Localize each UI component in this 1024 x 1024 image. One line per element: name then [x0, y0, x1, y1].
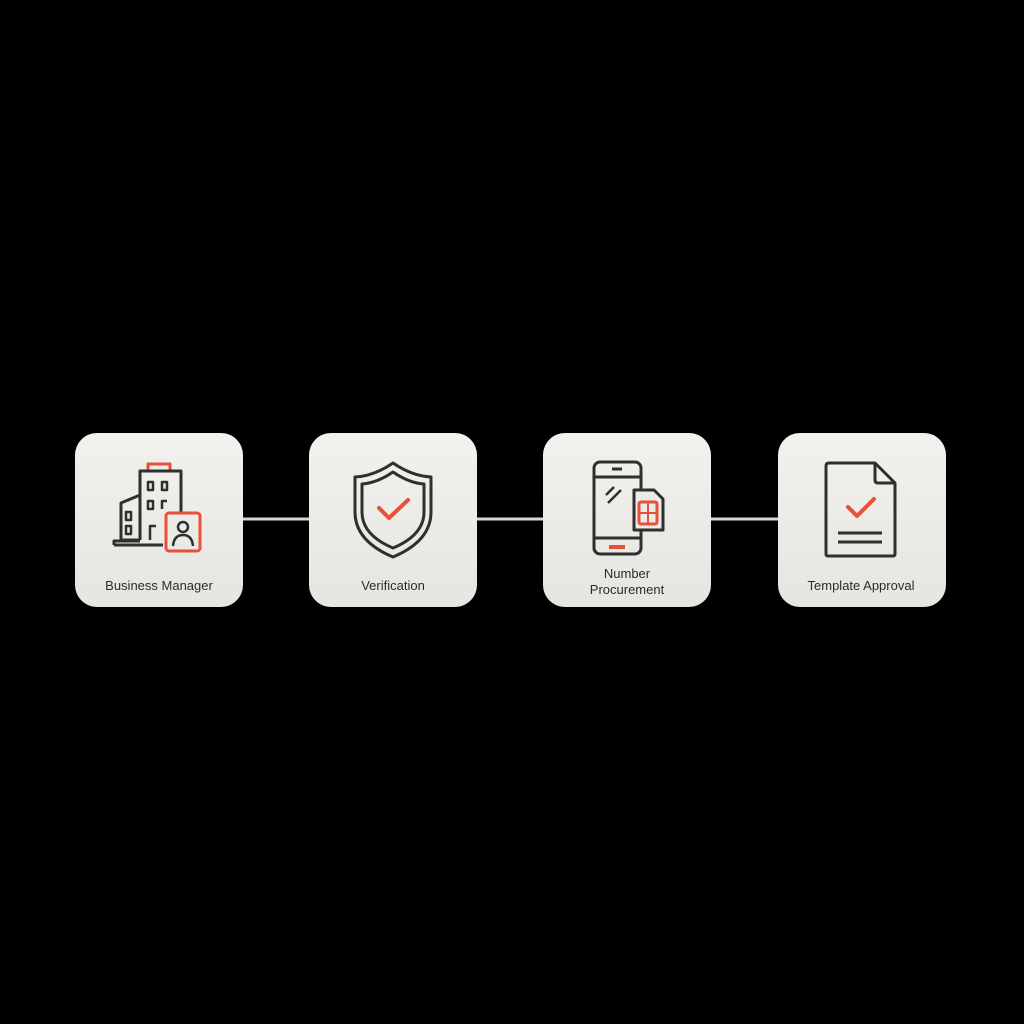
icon: shield with check	[355, 463, 431, 557]
label: Business Manager	[105, 578, 214, 593]
label: Procurement	[590, 582, 665, 597]
label: Number	[604, 566, 651, 581]
label	[590, 566, 665, 597]
icon: phone with SIM	[594, 462, 663, 554]
label: Template Approval	[808, 578, 915, 593]
card: Verification	[309, 433, 477, 607]
card: Template Approval	[778, 433, 946, 607]
label: Verification	[361, 578, 425, 593]
card: Number Procurement	[543, 433, 711, 607]
icon: document with check	[826, 463, 895, 556]
connector lines	[243, 518, 778, 520]
icon: building with badge	[114, 464, 200, 551]
card: Business Manager	[75, 433, 243, 607]
